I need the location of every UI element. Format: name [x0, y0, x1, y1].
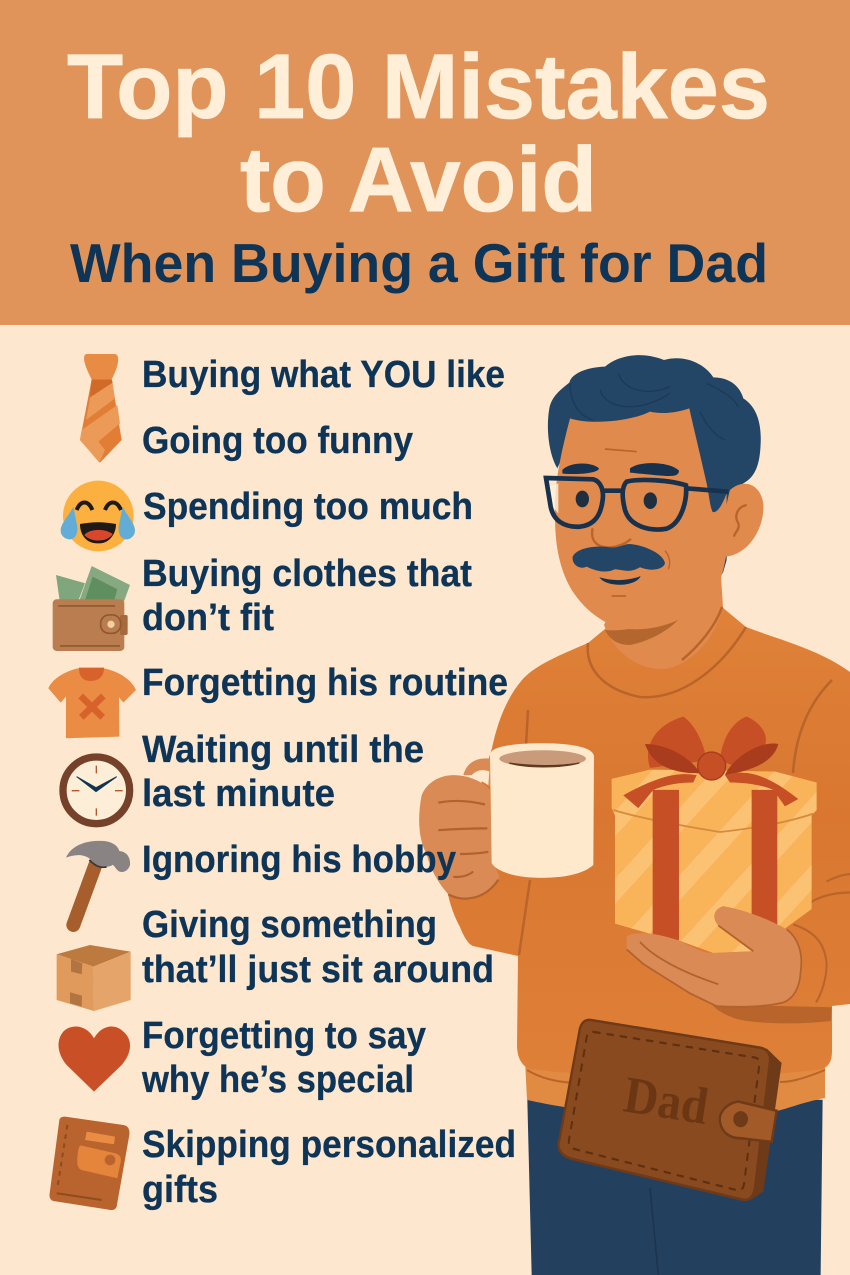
icon: wall clock [63, 757, 130, 824]
icon: personalized wallet [49, 1117, 129, 1210]
item 5: Forgetting his routine [142, 662, 508, 704]
head [546, 355, 763, 629]
face [555, 408, 727, 629]
nose [592, 528, 631, 547]
item 3: Spending too much [143, 486, 473, 528]
sweater [448, 600, 850, 1112]
icon: laughing crying emoji [61, 481, 135, 551]
icon: wallet with cash [53, 566, 130, 651]
item 8: Giving something [142, 904, 437, 946]
item 4: Buying clothes that [142, 553, 472, 595]
illustration: dad with gift [419, 355, 850, 1275]
hair [548, 355, 761, 574]
icon: heart [59, 1027, 130, 1092]
title: to Avoid [240, 129, 597, 231]
item 8 [142, 904, 494, 991]
item 2: Going too funny [142, 420, 413, 462]
ear [723, 484, 763, 557]
item 9 [141, 1015, 426, 1101]
icon: hammer [66, 841, 130, 925]
item 6: Waiting until the [142, 729, 424, 771]
gift box [612, 717, 817, 953]
eyebrows [562, 464, 599, 474]
item 10: gifts [142, 1169, 218, 1211]
item 6: last minute [142, 773, 335, 815]
header banner [0, 0, 850, 325]
neck [604, 560, 723, 669]
leather wallet labelled Dad: Dad [620, 1067, 712, 1136]
icon: cardboard box [57, 945, 131, 1011]
item 10: Skipping personalized [142, 1124, 516, 1166]
supporting hand [627, 906, 801, 1007]
item 4 [142, 553, 472, 639]
item 1: Buying what YOU like [142, 354, 505, 396]
leather wallet labelled Dad [558, 1020, 782, 1201]
item 6 [142, 729, 424, 815]
item 9: why he’s special [141, 1059, 414, 1101]
item 9: Forgetting to say [142, 1015, 426, 1057]
moustache [573, 544, 665, 572]
subtitle: When Buying a Gift for Dad [70, 232, 768, 294]
icon: t-shirt with X [48, 668, 136, 738]
title [67, 36, 770, 231]
item 8: that’ll just sit around [142, 949, 494, 991]
item 4: don’t fit [142, 597, 274, 639]
ribbon bow [648, 717, 766, 770]
sleeve and shadow under hand [712, 874, 850, 1023]
eyes [576, 491, 589, 507]
mug and hand [419, 743, 594, 900]
mistakes list [141, 354, 516, 1211]
trousers [527, 1100, 823, 1275]
item 10 [142, 1124, 516, 1211]
icon: tie [80, 354, 122, 463]
title: Top 10 Mistakes [67, 36, 770, 138]
glasses [550, 483, 558, 513]
item 7: Ignoring his hobby [142, 839, 456, 881]
mouth [599, 576, 641, 585]
